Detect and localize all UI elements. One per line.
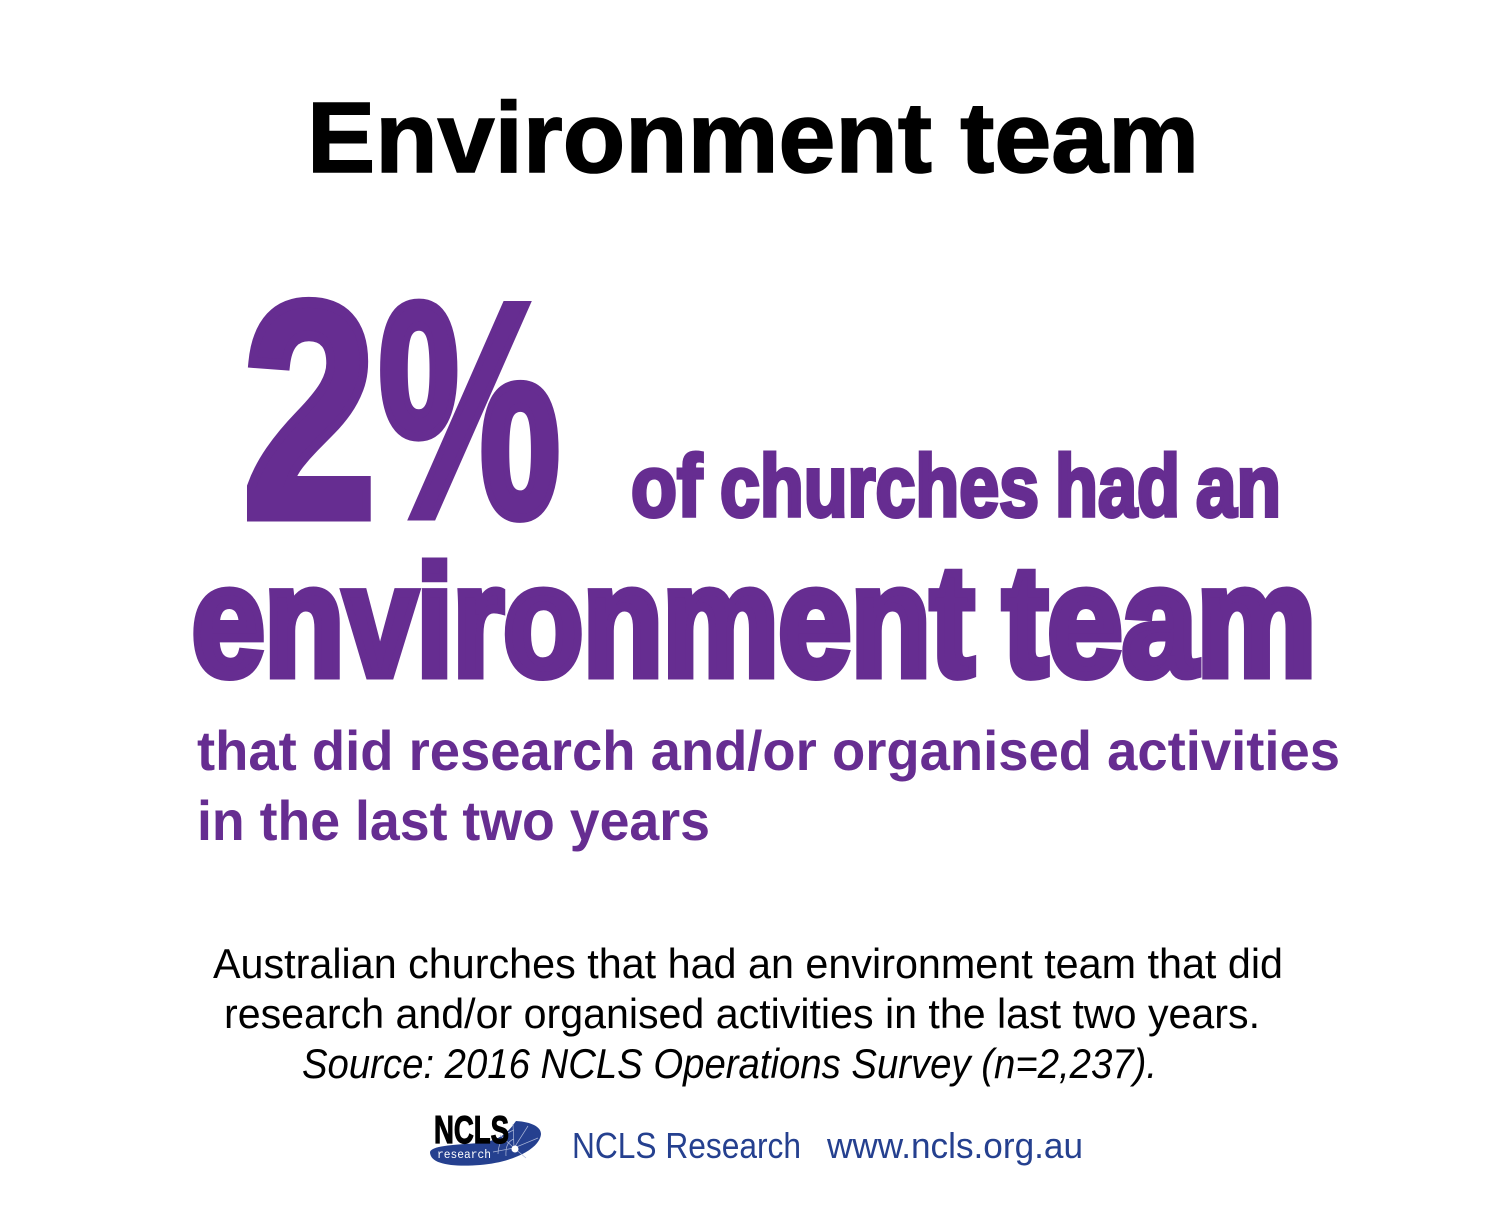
description and source: research and/or organised activities in the last two years.: [224, 990, 1260, 1037]
headline statistic: 2%: [243, 239, 561, 581]
qualifier text: [197, 719, 1340, 852]
qualifier text: in the last two years: [197, 789, 710, 852]
statistic label: of churches had an: of: [631, 438, 703, 535]
statistic label: of churches had an: an: [1196, 438, 1281, 535]
footer: organisation and website: www.ncls.org.au: [826, 1125, 1083, 1166]
headline statistic: 2%: %: [378, 239, 561, 581]
statistic label: of churches had an: [631, 438, 1281, 535]
icon: NCLS research logo: NCLS: [434, 1109, 509, 1152]
headline statistic: 2%: 2: [243, 239, 376, 581]
statistic label: of churches had an: churches: [720, 438, 1039, 535]
qualifier text: that did research and/or organised activities: [197, 719, 1340, 782]
large phrase: environment team: environment: [192, 535, 974, 709]
footer: organisation and website: [572, 1125, 1083, 1166]
large phrase: environment team: team: [1003, 535, 1316, 709]
description and source: Source: 2016 NCLS Operations Survey (n=2,237).: [302, 1040, 1157, 1087]
icon: NCLS research logo: research: [437, 1148, 491, 1162]
description and source: [213, 940, 1283, 1087]
footer: organisation and website: NCLS Research: [572, 1125, 801, 1166]
statistic label: of churches had an: had: [1055, 438, 1180, 535]
title: Environment team: [307, 82, 1199, 194]
description and source: Australian churches that had an environment team that did: [213, 940, 1283, 987]
